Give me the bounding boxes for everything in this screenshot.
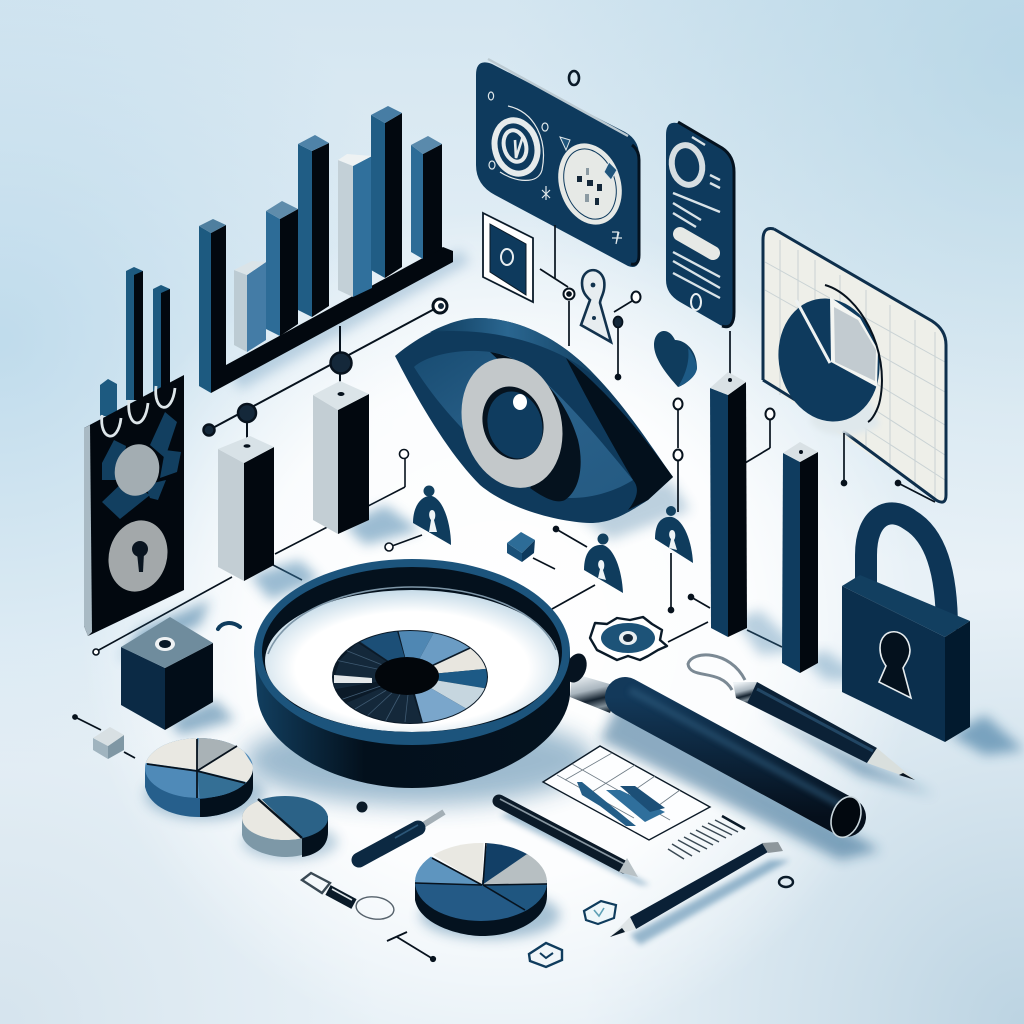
ring and hex icons (529, 877, 793, 967)
small ring (569, 71, 579, 85)
icon: framed square (483, 213, 533, 302)
icon: phone avatar ring (668, 142, 706, 188)
icon: key with ring (302, 873, 395, 922)
column: short block (218, 436, 320, 600)
icon: small padlock centre (584, 534, 623, 593)
icon: at-sign ring (489, 106, 543, 180)
icon: small padlock right (655, 506, 693, 563)
pie chart: bottom (410, 835, 560, 939)
eye (395, 318, 690, 540)
column: tall block (313, 381, 420, 545)
pie chart: left (140, 730, 265, 820)
handle (561, 650, 866, 842)
document with chart (543, 746, 710, 840)
donut chart inside the lens (332, 630, 488, 724)
magnifying glass (245, 559, 880, 860)
panel: top dashboard card (476, 59, 639, 267)
icon: small padlock left (385, 486, 451, 551)
icon: keyhole tag (581, 270, 611, 342)
icon: cube with button (121, 617, 235, 735)
pie chart: small two-tone (235, 790, 338, 860)
icon: gear badge (590, 617, 667, 660)
dot (356, 802, 368, 812)
pencil (610, 842, 790, 945)
pen lying left (499, 799, 650, 885)
panel: pie chart on grid (763, 228, 946, 502)
icon: heart (654, 331, 697, 387)
small cube (507, 532, 555, 569)
keyhole (879, 632, 911, 698)
top connector lines with nodes (204, 299, 447, 444)
marker lines lower left (73, 715, 435, 961)
tall pillar (710, 372, 800, 655)
pen with loop (688, 655, 935, 795)
padlock (842, 513, 1024, 755)
pie (767, 289, 891, 431)
second pillar (782, 442, 865, 680)
lower connector lines (93, 450, 408, 655)
bar chart: isometric bars on a base (199, 106, 470, 393)
document hatch text lines (668, 816, 745, 859)
icon: dial with symbols (550, 137, 630, 231)
panel: keyhole card with pins (84, 267, 210, 660)
icon: small flashlight (359, 812, 444, 860)
connector lines under dashboard (540, 225, 574, 346)
panel: phone (666, 122, 734, 327)
arc mark (218, 623, 240, 629)
connector nodes right of keyhole (614, 292, 640, 380)
eye connectors and nodes (552, 331, 935, 647)
small grey cube (93, 727, 124, 759)
lens rim side (254, 652, 570, 788)
pie wedge base (810, 400, 880, 435)
